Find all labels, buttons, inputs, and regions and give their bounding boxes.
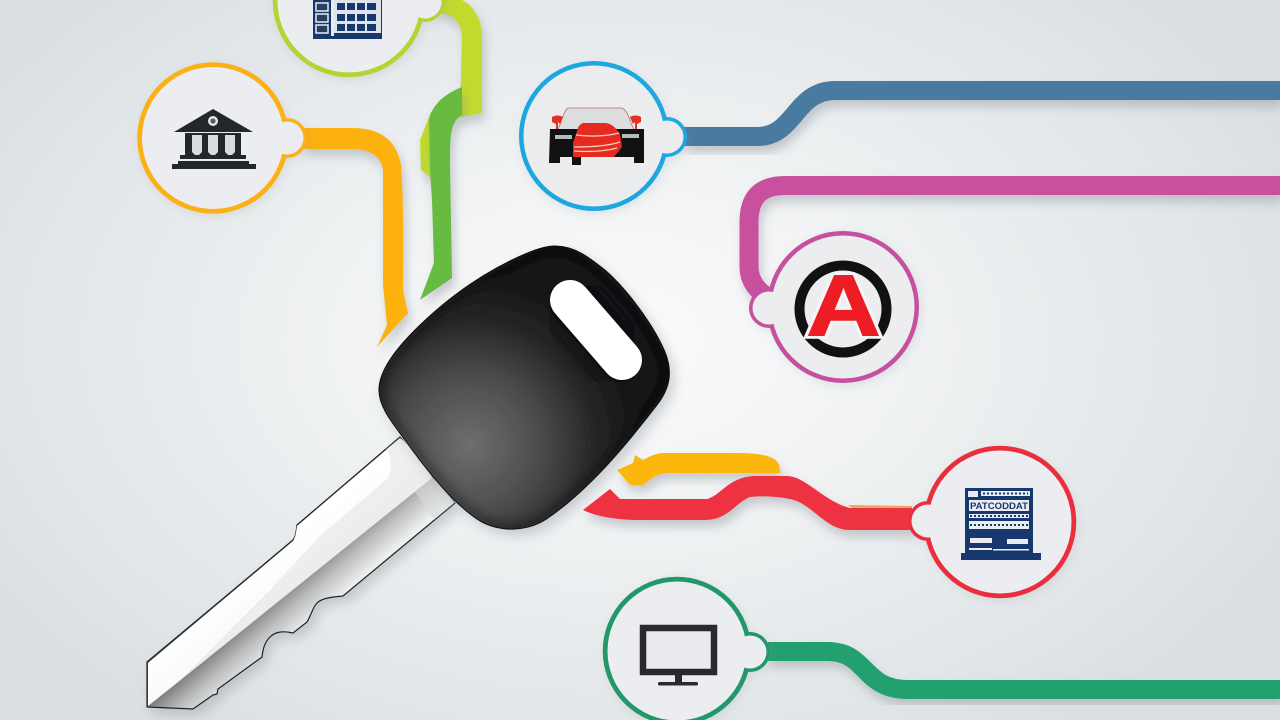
icon: computer monitor (643, 628, 714, 686)
blade shoulder (415, 478, 458, 520)
magenta ribbon (749, 186, 1280, 300)
key head (379, 246, 669, 529)
icon: terminal screen (961, 488, 1041, 560)
red ribbon (583, 476, 912, 530)
blade groove shading (150, 438, 432, 705)
key ring slot (570, 300, 622, 360)
node: laptop terminal (910, 448, 1074, 596)
screen text: PATCODDAT (970, 501, 1029, 511)
node: letter A logo (751, 234, 916, 380)
letter A: A (806, 258, 880, 354)
node: car (522, 64, 685, 208)
icon: office building (313, 0, 382, 39)
node: bank (140, 65, 305, 211)
head body (379, 246, 669, 529)
small yellow ribbon (617, 453, 780, 485)
letter A outline: A (806, 258, 880, 354)
magenta ring with tab (751, 234, 916, 380)
head shading (379, 246, 669, 529)
head edge shade (379, 246, 669, 529)
icon: circled letter A (800, 258, 886, 354)
blade outline (147, 437, 455, 709)
mirrors (552, 116, 563, 130)
green ring with tab (606, 580, 768, 720)
blue ring with tab (522, 64, 685, 208)
orange ribbon sliver (848, 505, 912, 514)
lime ring with tab (276, 0, 443, 74)
green ribbon (420, 87, 462, 300)
steel blue ribbon (684, 90, 1280, 136)
red ring with tab (910, 448, 1074, 596)
black ring (800, 266, 886, 352)
headlights (555, 135, 572, 139)
black body and wheels (549, 129, 644, 165)
key ring slot shadow (566, 304, 618, 364)
yellow ring with tab (140, 65, 305, 211)
blade upper face (148, 438, 432, 706)
red hood highlights (574, 133, 620, 151)
lime ribbon (420, 0, 482, 180)
key blade (147, 437, 458, 709)
node: monitor (606, 580, 768, 720)
icon: bank building (172, 109, 256, 169)
node: office building (276, 0, 443, 74)
windshield (558, 108, 634, 130)
red hood and grille (573, 123, 622, 157)
icon: car front (549, 108, 644, 165)
yellow ribbon to key (303, 128, 408, 347)
emerald ribbon (768, 652, 1280, 690)
